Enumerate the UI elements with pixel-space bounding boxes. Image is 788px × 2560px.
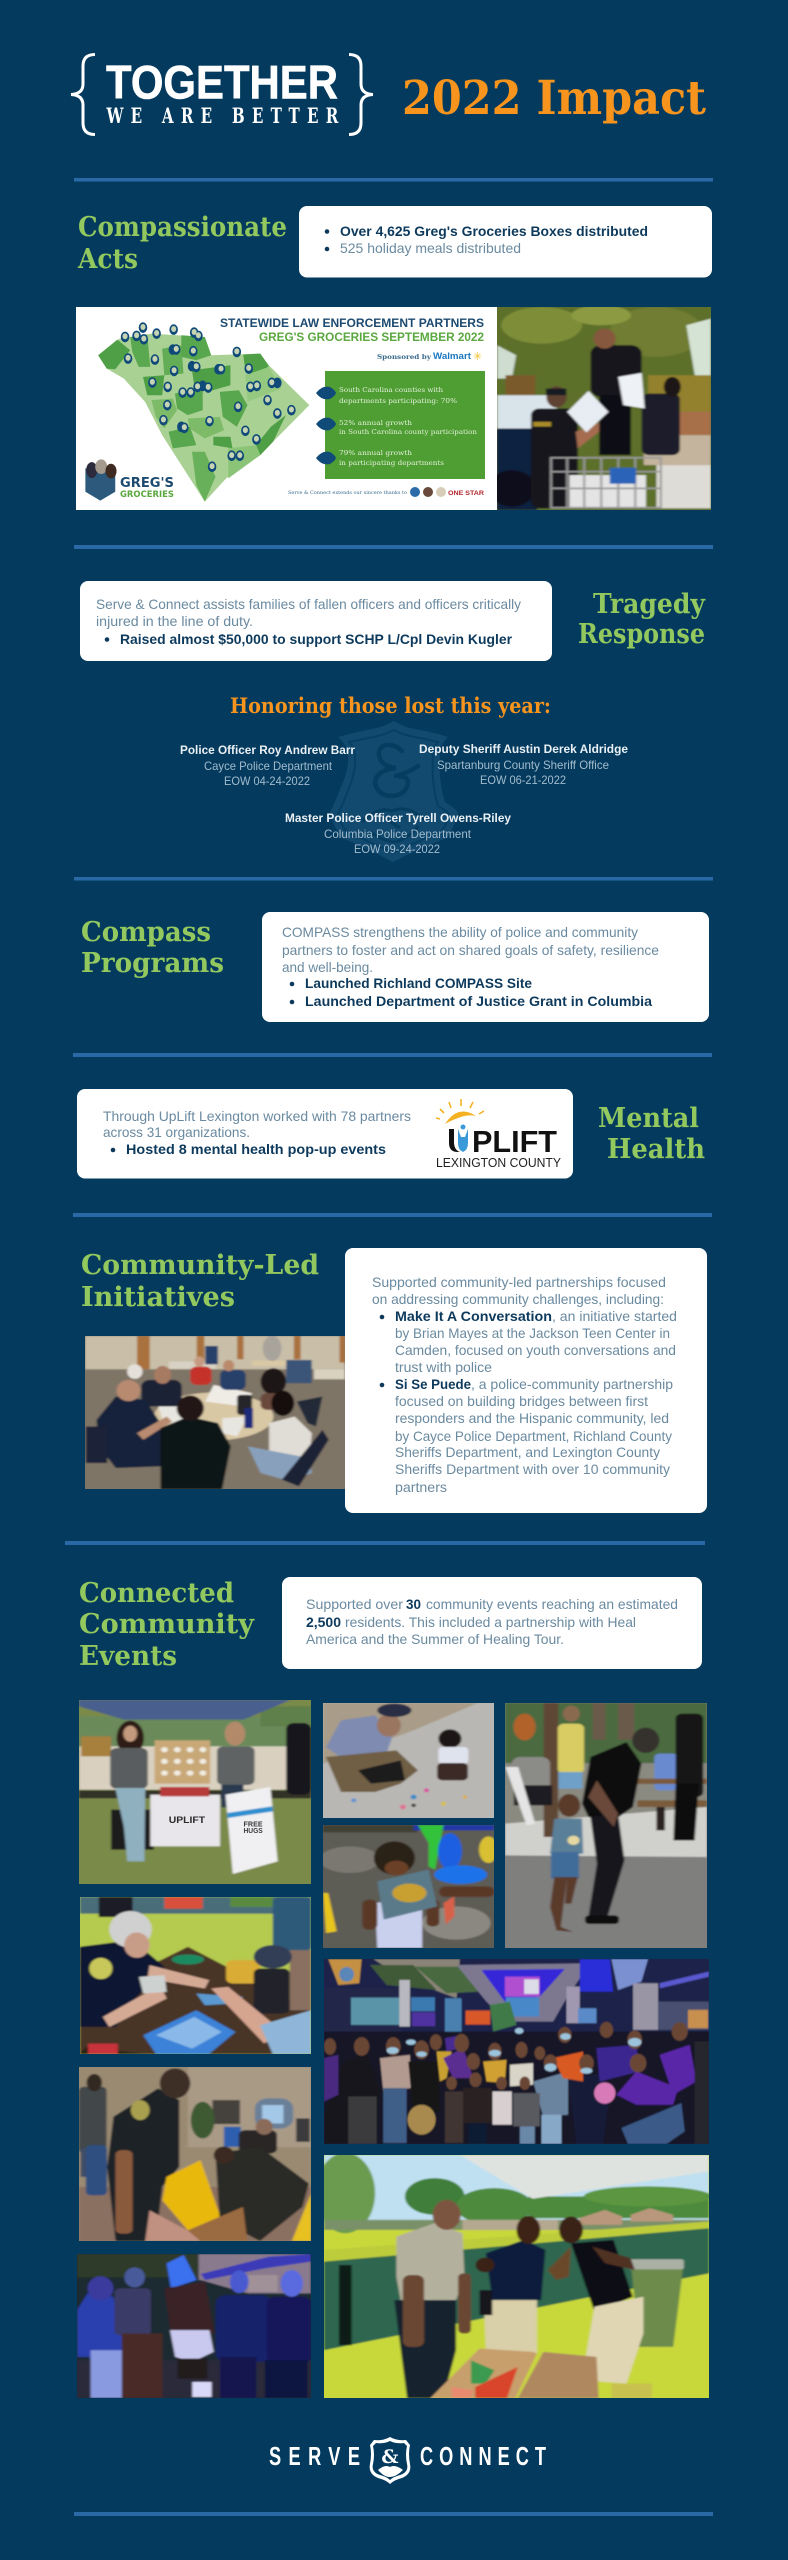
panel: community-led text: Camden, focused on youth conversations and bbox=[395, 1342, 676, 1358]
infographic title: GREG'S GROCERIES SEPTEMBER 2022 bbox=[259, 332, 484, 344]
panel: green statistics bbox=[316, 371, 485, 479]
panel: community-led text: by Brian Mayes at the Jackson Teen Center in bbox=[395, 1325, 670, 1341]
photo: officer dancing with child bbox=[505, 1703, 707, 1948]
sign text: UPLIFT bbox=[169, 1815, 205, 1826]
heading: Community-Led Initiatives: Community-Led bbox=[81, 1250, 319, 1281]
photo: UpLift booth: HUGS bbox=[243, 1826, 263, 1835]
panel: community-led text: , a police-community partnership bbox=[471, 1376, 673, 1392]
section: Tragedy Response bbox=[80, 581, 706, 862]
logo: UpLift Lexington County bbox=[436, 1099, 561, 1170]
photo: officers loading grocery boxes bbox=[497, 307, 711, 510]
panel: events text bbox=[282, 1577, 702, 1669]
panel: community-led text: , an initiative started bbox=[552, 1308, 677, 1324]
photo: UpLift booth: FREE bbox=[243, 1819, 263, 1828]
panel: mental health text: Hosted 8 mental health pop-up events bbox=[126, 1141, 386, 1157]
memorial: Austin Derek Aldridge bbox=[419, 744, 628, 787]
infographic title: ✳ bbox=[473, 350, 482, 363]
section: Compass Programs bbox=[81, 912, 709, 1022]
panel: community-led text bbox=[345, 1248, 707, 1513]
logo: Together We Are Better: TOGETHER bbox=[106, 56, 338, 108]
panel: events text: America and the Summer of Healing Tour. bbox=[306, 1631, 564, 1647]
panel: mental health text bbox=[77, 1089, 573, 1178]
panel: compass text: COMPASS strengthens the ability of police and community bbox=[282, 924, 638, 940]
memorial: Roy Andrew Barr bbox=[180, 745, 356, 788]
logo: UpLift Lexington County: PLIFT bbox=[472, 1124, 557, 1159]
panel: compass text: and well-being. bbox=[282, 959, 373, 975]
panel: green statistics: departments participating: 70% bbox=[339, 397, 457, 405]
memorial: Roy Andrew Barr: EOW 04-24-2022 bbox=[224, 774, 310, 788]
heading: Compass Programs: Compass bbox=[81, 917, 211, 948]
memorial: Tyrell Owens-Riley: Columbia Police Department bbox=[324, 827, 472, 841]
photo: Santa with officers at night bbox=[77, 2254, 311, 2398]
panel: events text: Supported over bbox=[306, 1596, 403, 1612]
heading: Mental Health: Health bbox=[607, 1134, 705, 1165]
thanks line with partner logos bbox=[288, 487, 484, 497]
photo: officer handing out yellow bags bbox=[79, 2067, 311, 2241]
panel: groceries stats: 525 holiday meals distributed bbox=[340, 240, 521, 256]
panel: community-led text: Sheriffs Department, and Lexington County bbox=[395, 1444, 660, 1460]
logo: Serve & Connect bbox=[269, 2437, 546, 2484]
section: Compassionate Acts bbox=[76, 206, 712, 510]
heading: Compassionate Acts: Acts bbox=[77, 244, 138, 275]
panel: tragedy response text: injured in the line of duty. bbox=[96, 613, 253, 629]
heading: Compassionate Acts: Compassionate bbox=[78, 212, 287, 243]
heading: Honoring those lost this year: Honoring those lost this year: bbox=[230, 693, 551, 718]
heading: Mental Health: Mental bbox=[598, 1103, 699, 1134]
photo: three officers on field with snack boxes bbox=[324, 2155, 709, 2398]
panel: community-led text: by Cayce Police Department, Richland County bbox=[395, 1428, 672, 1444]
logo: Greg's Groceries: GREG'S bbox=[120, 476, 174, 491]
heading: Connected Community Events: Community bbox=[79, 1609, 255, 1640]
panel: community-led text: responders and the Hispanic community, led bbox=[395, 1410, 669, 1426]
panel: green statistics: in South Carolina county participation bbox=[339, 428, 477, 436]
map of South Carolina counties bbox=[85, 322, 310, 502]
memorial: Roy Andrew Barr: Police Officer Roy Andrew Barr bbox=[180, 745, 356, 757]
panel: compass text bbox=[262, 912, 709, 1022]
photo: officer drawing chalk with child bbox=[323, 1703, 494, 1818]
heading: Mental Health bbox=[598, 1103, 705, 1165]
panel: green statistics: 52% annual growth bbox=[339, 419, 412, 427]
logo: Greg's Groceries bbox=[120, 476, 174, 500]
heading: Compass Programs bbox=[81, 917, 224, 979]
logo: Together We Are Better bbox=[71, 54, 373, 134]
header bbox=[71, 54, 706, 134]
heading: Tragedy Response bbox=[578, 589, 706, 650]
photo: group at entertainment venue bbox=[324, 1959, 709, 2144]
memorial: Tyrell Owens-Riley: EOW 09-24-2022 bbox=[354, 842, 440, 856]
infographic title: Sponsored by bbox=[377, 353, 431, 361]
panel: mental health text: across 31 organizations. bbox=[103, 1124, 250, 1140]
thanks line with partner logos: Serve & Connect extends our sincere thanks to bbox=[288, 490, 407, 496]
heading: Compass Programs: Programs bbox=[81, 948, 224, 979]
logo: Serve & Connect: SERVE bbox=[269, 2442, 360, 2471]
panel: compass text: partners to foster and act on shared goals of safety, resilience bbox=[282, 942, 659, 958]
badge behind the Greg's Groceries logo bbox=[85, 468, 115, 501]
title: 2022 Impact: 2022 Impact bbox=[402, 71, 706, 126]
section: Mental Health bbox=[77, 1089, 705, 1178]
logo: Serve & Connect: CONNECT bbox=[420, 2442, 546, 2471]
panel: community-led text: Make It A Conversation bbox=[395, 1308, 552, 1324]
thanks line with partner logos: ONE STAR bbox=[448, 490, 484, 497]
panel: groceries stats bbox=[299, 206, 712, 278]
panel: tragedy response text bbox=[80, 581, 552, 661]
panel: green statistics: 79% annual growth bbox=[339, 449, 412, 457]
heading: Connected Community Events: Events bbox=[79, 1641, 177, 1672]
logo: Together We Are Better: WE ARE BETTER bbox=[106, 105, 339, 129]
logo: UpLift Lexington County: LEXINGTON COUNTY bbox=[436, 1155, 561, 1170]
heading: Tragedy Response: Response bbox=[578, 619, 705, 650]
icon: shield: & bbox=[381, 2446, 399, 2468]
infographic title bbox=[220, 318, 484, 363]
icon: watermark badge bbox=[330, 721, 458, 862]
panel: events text: residents. This included a partnership with Heal bbox=[345, 1614, 636, 1630]
icon: shield bbox=[370, 2437, 410, 2484]
infographic title: STATEWIDE LAW ENFORCEMENT PARTNERS bbox=[220, 318, 484, 330]
panel: community-led text: trust with police bbox=[395, 1359, 492, 1375]
panel: community-led text: Sheriffs Department with over 10 community bbox=[395, 1461, 670, 1477]
infographic: statewide law enforcement partners map bbox=[76, 307, 497, 510]
memorial: Tyrell Owens-Riley: Master Police Officer Tyrell Owens-Riley bbox=[285, 813, 512, 825]
photo: child with balloon and toy bbox=[323, 1825, 494, 1948]
section: Community-Led Initiatives bbox=[81, 1248, 707, 1513]
heading: Community-Led Initiatives: Initiatives bbox=[81, 1282, 235, 1313]
panel: mental health text: Through UpLift Lexington worked with 78 partners bbox=[103, 1108, 411, 1124]
panel: green statistics: in participating departments bbox=[339, 459, 444, 467]
heading: Community-Led Initiatives bbox=[81, 1250, 319, 1313]
panel: community-led text: Supported community-led partnerships focused bbox=[372, 1274, 666, 1290]
panel: community-led text: focused on building bridges between first bbox=[395, 1393, 648, 1409]
photo: officer and children playing bingo bbox=[80, 1897, 311, 2054]
panel: green statistics: South Carolina counties with bbox=[339, 386, 443, 394]
memorial: Tyrell Owens-Riley bbox=[285, 813, 512, 856]
memorial: Roy Andrew Barr: Cayce Police Department bbox=[204, 759, 333, 773]
infographic title: Walmart bbox=[433, 351, 472, 362]
panel: groceries stats: Over 4,625 Greg's Groceries Boxes distributed bbox=[340, 223, 648, 239]
panel: community-led text: on addressing community challenges, including: bbox=[372, 1291, 664, 1307]
photo: UpLift booth bbox=[79, 1700, 311, 1884]
section: Connected Community Events bbox=[77, 1577, 712, 2398]
heading: Compassionate Acts bbox=[77, 212, 287, 275]
panel: compass text: Launched Richland COMPASS Site bbox=[305, 975, 532, 991]
heading: Tragedy Response: Tragedy bbox=[593, 589, 706, 620]
panel: events text: 2,500 bbox=[306, 1614, 341, 1630]
panel: events text: 30 bbox=[406, 1596, 421, 1612]
logo: Greg's Groceries: GROCERIES bbox=[120, 490, 174, 500]
panel: compass text: Launched Department of Justice Grant in Columbia bbox=[305, 993, 652, 1009]
panel: events text: community events reaching an estimated bbox=[426, 1596, 678, 1612]
heading: Connected Community Events bbox=[79, 1578, 255, 1672]
memorial: Austin Derek Aldridge: Spartanburg County Sheriff Office bbox=[437, 758, 609, 772]
photo: officers and community around table bbox=[85, 1336, 345, 1489]
panel: tragedy response text: Raised almost $50,000 to support SCHP L/Cpl Devin Kugler bbox=[120, 631, 513, 647]
heading: Connected Community Events: Connected bbox=[79, 1578, 234, 1609]
panel: community-led text: Si Se Puede bbox=[395, 1376, 471, 1392]
panel: community-led text: partners bbox=[395, 1479, 447, 1495]
memorial: Austin Derek Aldridge: EOW 06-21-2022 bbox=[480, 773, 566, 787]
memorial: Austin Derek Aldridge: Deputy Sheriff Austin Derek Aldridge bbox=[419, 744, 628, 756]
panel: tragedy response text: Serve & Connect assists families of fallen officers and officers critically bbox=[96, 596, 521, 612]
